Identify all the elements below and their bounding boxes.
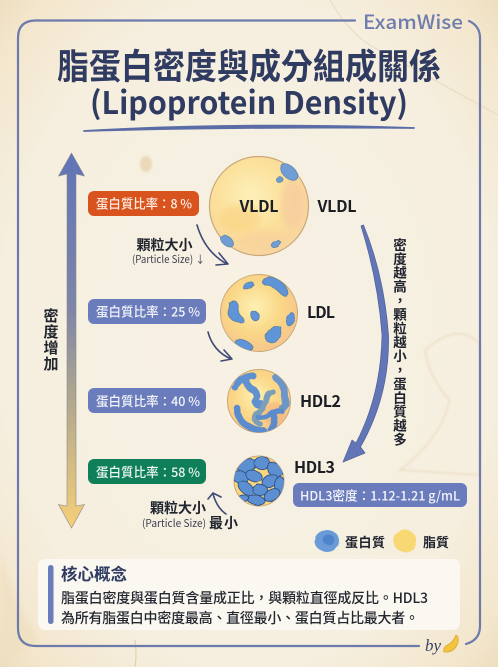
pill: HDL3 density: HDL3密度：1.12-1.21 g/mL [300, 486, 460, 504]
signature: by banana: by [425, 636, 442, 655]
title: (Lipoprotein Density) [90, 78, 408, 123]
label: LDL: LDL [307, 299, 335, 323]
pill: protein 8%: 蛋白質比率：8 % [96, 194, 192, 212]
particle: LDL [220, 274, 298, 353]
text: core concept body: 脂蛋白密度與蛋白質含量成正比，與顆粒直徑成反比。HDL3 [61, 588, 428, 608]
particle: HDL2 [228, 370, 290, 432]
pill: protein 40% [88, 388, 206, 413]
pill: protein 25%: 蛋白質比率：25 % [96, 302, 200, 320]
pill: protein 40%: 蛋白質比率：40 % [96, 391, 200, 410]
icon: protein blob [314, 530, 340, 552]
pill: protein 58%: 蛋白質比率：58 % [96, 462, 200, 481]
curved trend arrow [343, 225, 389, 462]
text: core concept body: 為所有脂蛋白中密度最高、直徑最小、蛋白質占比最大者。 [61, 608, 419, 628]
heading: core concept: 核心概念 [61, 561, 128, 585]
arrow: LDL to HDL2 size [208, 332, 232, 361]
particle size label: large [132, 235, 205, 267]
arrow: smallest size [208, 493, 226, 514]
particle: VLDL [210, 156, 308, 256]
particle size label: smallest [142, 498, 238, 533]
legend [314, 530, 449, 552]
title [57, 39, 441, 123]
density label: 密度增加 [40, 307, 62, 372]
label: VLDL: VLDL [316, 193, 356, 217]
trend label: 密度越高，顆粒越小，蛋白質越多 [390, 237, 410, 447]
pill: protein 8% [88, 191, 199, 216]
legend: 蛋白質 [345, 532, 385, 551]
legend: 脂質 [423, 532, 449, 551]
title: 脂蛋白密度與成分組成關係 [57, 39, 441, 90]
particle: HDL3 [231, 456, 286, 507]
particle size label: large: (Particle Size) ↓ [132, 252, 205, 267]
density arrow [58, 153, 84, 528]
pill: protein 25% [88, 299, 206, 324]
pill: protein 58% [88, 459, 206, 484]
particle size label: smallest: 顆粒大小 [150, 498, 206, 518]
signature: by banana [425, 635, 458, 655]
particle size label: large: 顆粒大小 [136, 235, 192, 255]
arrow: VLDL to LDL size [197, 225, 228, 265]
particle size label: smallest: (Particle Size) [142, 516, 206, 531]
label: HDL2: HDL2 [300, 388, 341, 412]
panel: core concept [38, 559, 460, 630]
title underline [84, 126, 414, 131]
label: HDL3: HDL3 [294, 454, 335, 478]
particle: VLDL: VLDL [238, 193, 278, 217]
brand: ExamWise: ExamWise [363, 6, 463, 35]
icon: lipid blob [394, 530, 416, 552]
text: core concept body [61, 588, 428, 628]
particle size label: smallest: 最 小 [209, 513, 238, 533]
